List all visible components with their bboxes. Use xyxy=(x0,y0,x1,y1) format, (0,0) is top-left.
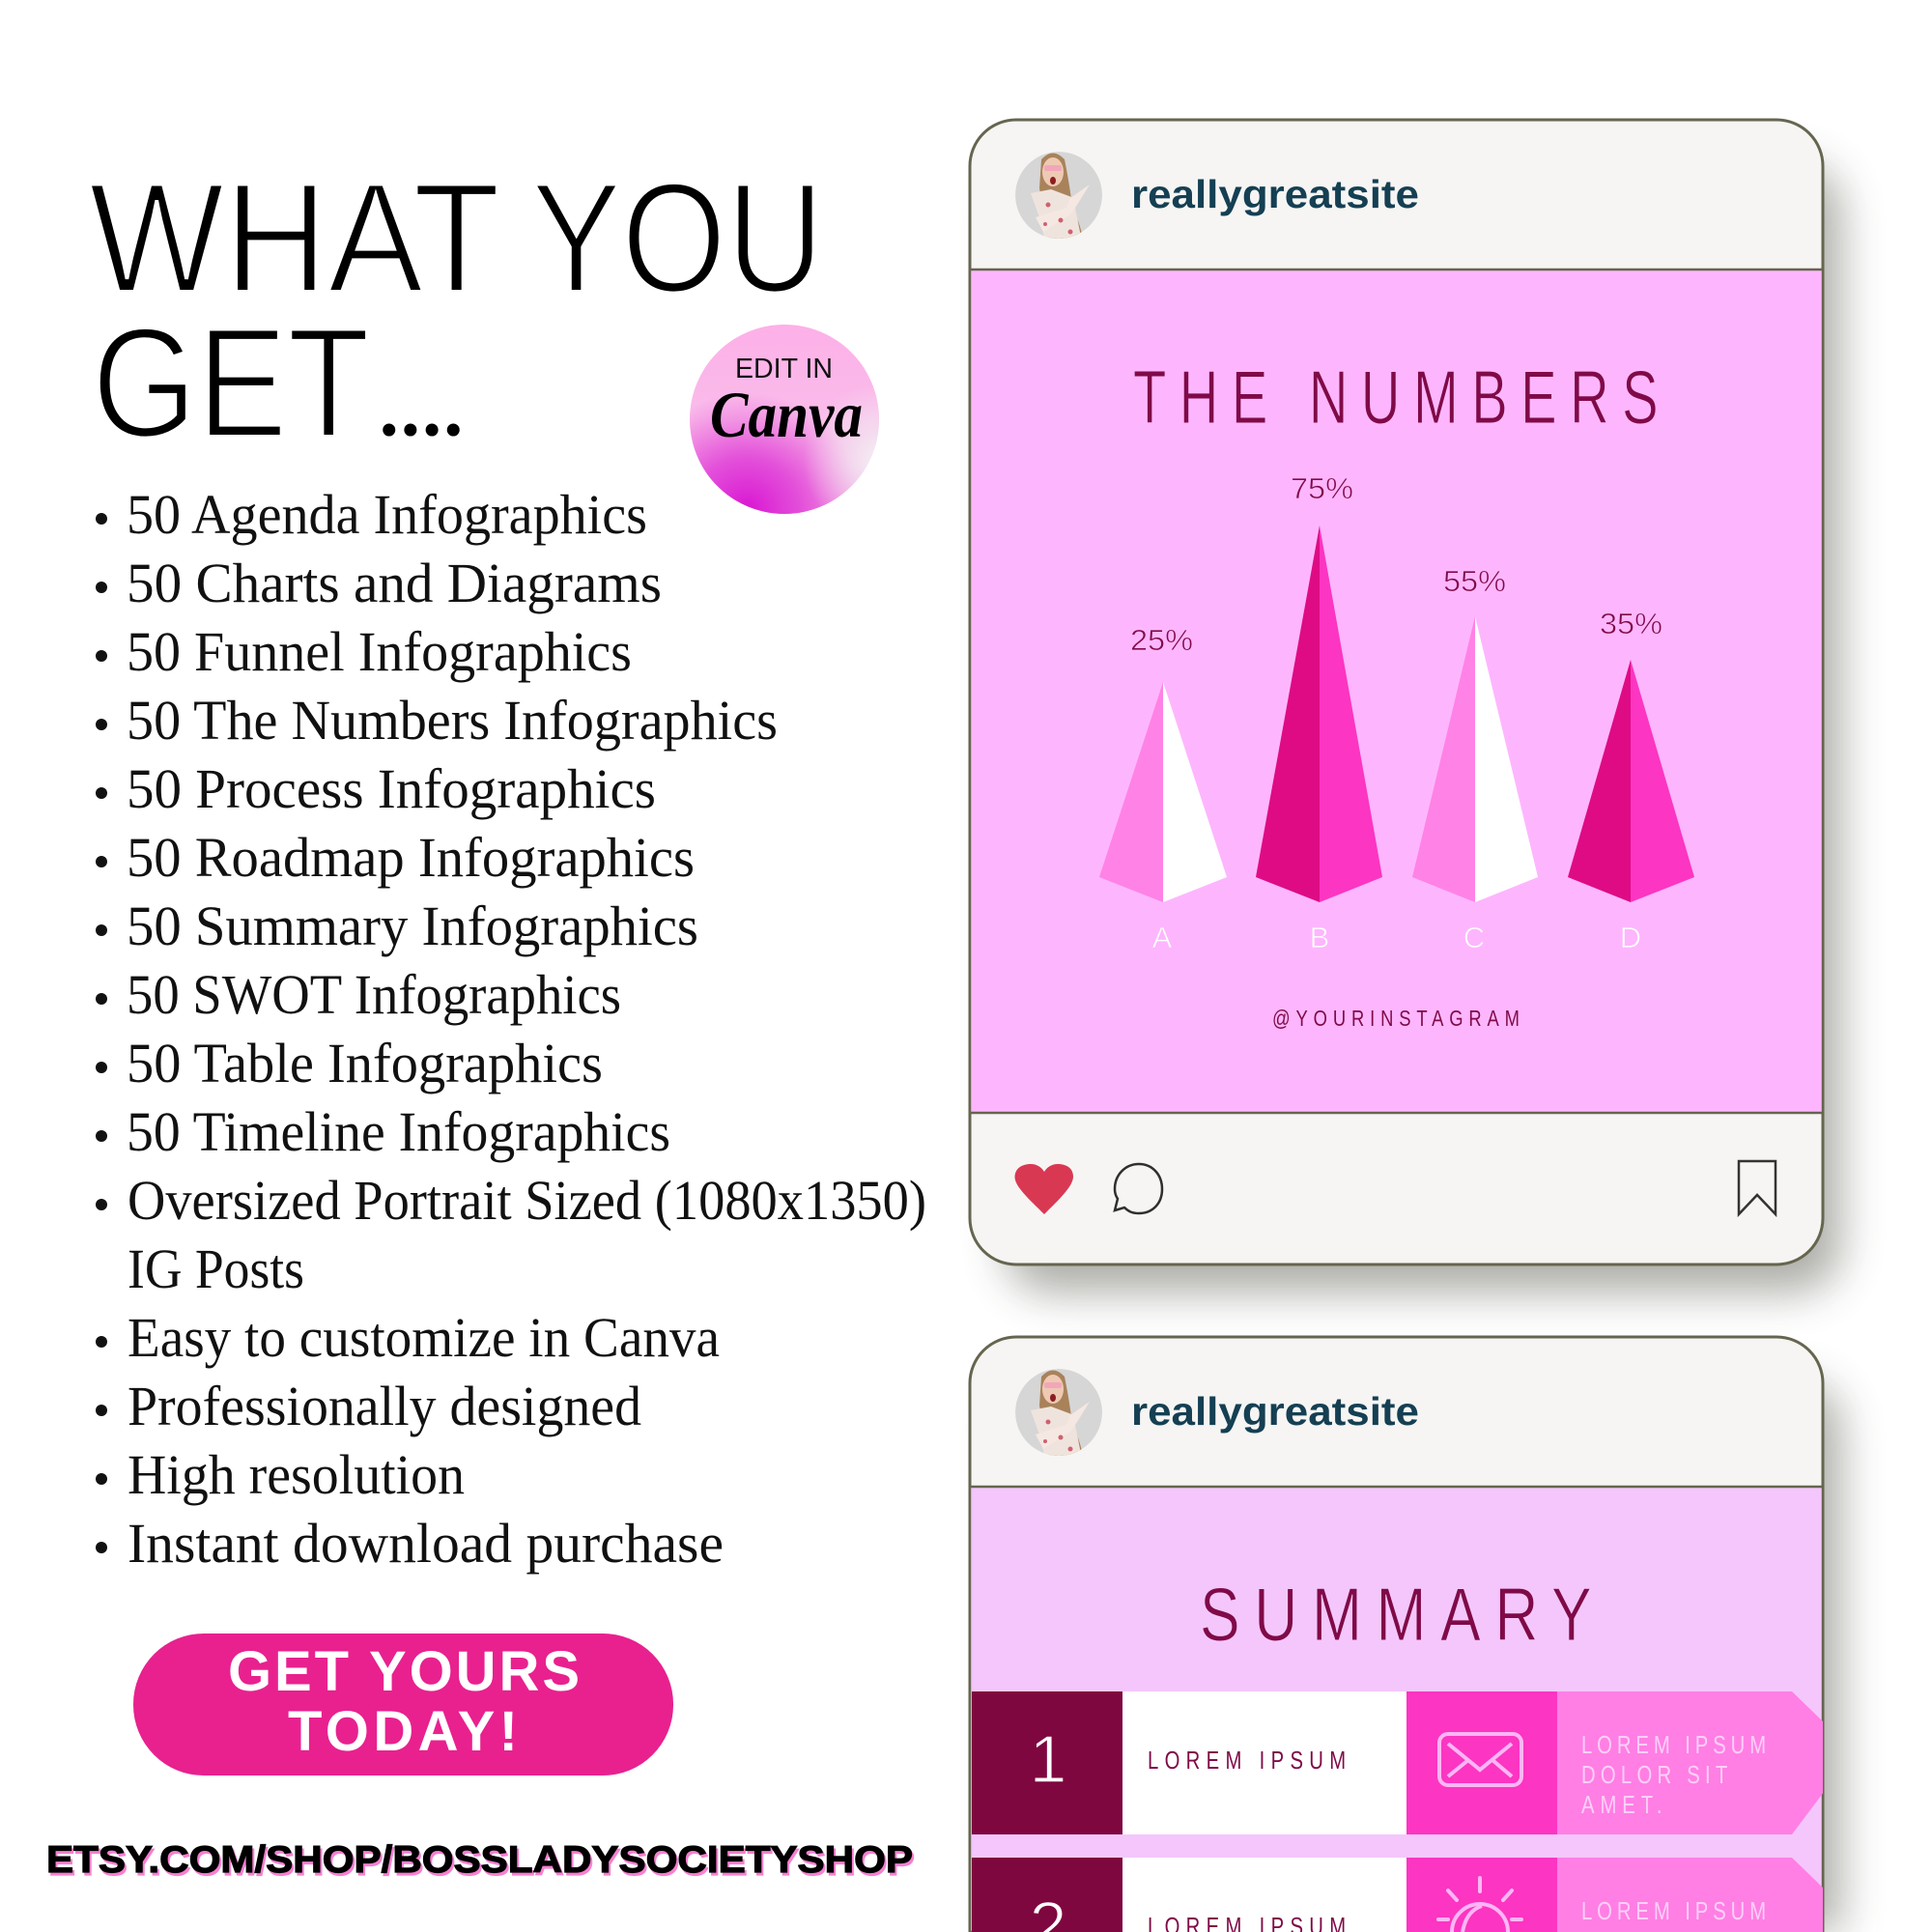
feature list: Instant download purchase xyxy=(128,1512,724,1575)
category labels: D xyxy=(1620,921,1641,954)
feature list: Easy to customize in Canva xyxy=(128,1306,720,1369)
chart: pyramids xyxy=(1099,471,1694,954)
table rows xyxy=(972,1691,1824,1932)
feature list: 50 The Numbers Infographics xyxy=(127,689,778,752)
button: get yours today xyxy=(133,1634,673,1776)
panel: post card the numbers xyxy=(970,120,1841,1293)
username: reallygreatsite xyxy=(1131,1389,1419,1434)
avatar xyxy=(1015,152,1102,242)
category labels xyxy=(1152,921,1641,954)
title xyxy=(89,151,824,470)
feature list: Professionally designed xyxy=(128,1375,641,1437)
feature list: 50 Funnel Infographics xyxy=(127,620,632,683)
handle: @YOURINSTAGRAM xyxy=(1272,1007,1520,1032)
panel: post card summary xyxy=(970,1337,1841,1932)
feature list xyxy=(96,483,926,1575)
row 1: DOLOR SIT xyxy=(1581,1761,1727,1789)
row 2: LOREM IPSUM xyxy=(1581,1897,1766,1925)
category labels: B xyxy=(1310,921,1329,954)
category labels: C xyxy=(1463,921,1485,954)
feature list: High resolution xyxy=(128,1443,465,1506)
feature list: 50 Table Infographics xyxy=(127,1032,603,1094)
heading: the numbers: THE NUMBERS xyxy=(1133,355,1659,440)
avatar xyxy=(1015,1369,1102,1459)
icon: comment xyxy=(1115,1164,1162,1213)
row 1: LOREM IPSUM xyxy=(1148,1747,1346,1775)
card shadow xyxy=(1820,1364,1867,1932)
button: get yours today: TODAY! xyxy=(288,1700,518,1763)
row 2 xyxy=(972,1858,1824,1932)
feature list: 50 Summary Infographics xyxy=(127,895,698,957)
feature list: Oversized Portrait Sized (1080x1350) xyxy=(128,1169,926,1232)
icon: envelope xyxy=(1439,1734,1521,1785)
title: WHAT xyxy=(89,151,500,326)
value labels: 55% xyxy=(1443,564,1506,598)
icon: light bulb xyxy=(1438,1878,1521,1932)
badge: edit in canva: Canva xyxy=(710,378,863,451)
card shadow xyxy=(1005,164,1841,1293)
shop url: ETSY.COM/SHOP/BOSSLADYSOCIETYSHOP xyxy=(46,1839,913,1881)
pyramid c xyxy=(1412,616,1538,902)
post image background xyxy=(970,1487,1823,1932)
feature list: 50 Roadmap Infographics xyxy=(127,826,695,889)
feature list: 50 SWOT Infographics xyxy=(127,963,621,1026)
icon: heart xyxy=(1014,1164,1073,1214)
feature list: 50 Timeline Infographics xyxy=(127,1100,670,1163)
post image background xyxy=(970,270,1823,1113)
row 1: LOREM IPSUM xyxy=(1581,1731,1766,1759)
feature list: 50 Agenda Infographics xyxy=(127,483,647,546)
card frame xyxy=(970,120,1823,1264)
row 1 xyxy=(972,1691,1824,1834)
value labels: 25% xyxy=(1130,623,1193,657)
title: YOU xyxy=(531,151,824,326)
category labels: A xyxy=(1152,921,1173,954)
feature list: 50 Process Infographics xyxy=(127,757,656,820)
value labels xyxy=(1130,471,1662,657)
badge: edit in canva: EDIT IN xyxy=(735,354,833,384)
button: get yours today: GET YOURS xyxy=(228,1640,580,1703)
pyramid d xyxy=(1568,660,1694,902)
title: .... xyxy=(376,340,467,458)
icon: bookmark xyxy=(1739,1161,1776,1214)
card frame xyxy=(970,1337,1823,1932)
value labels: 75% xyxy=(1291,471,1353,505)
pyramid a xyxy=(1099,682,1227,902)
heading: summary: SUMMARY xyxy=(1200,1572,1592,1657)
badge: edit in canva xyxy=(690,325,879,514)
row 1: 1 xyxy=(1030,1721,1066,1797)
row 1: AMET. xyxy=(1581,1791,1662,1819)
pyramid b xyxy=(1256,526,1382,902)
value labels: 35% xyxy=(1600,607,1662,640)
feature list: 50 Charts and Diagrams xyxy=(127,552,662,614)
username: reallygreatsite xyxy=(1131,172,1419,216)
title: GET xyxy=(92,296,370,470)
feature list: IG Posts xyxy=(128,1237,304,1300)
